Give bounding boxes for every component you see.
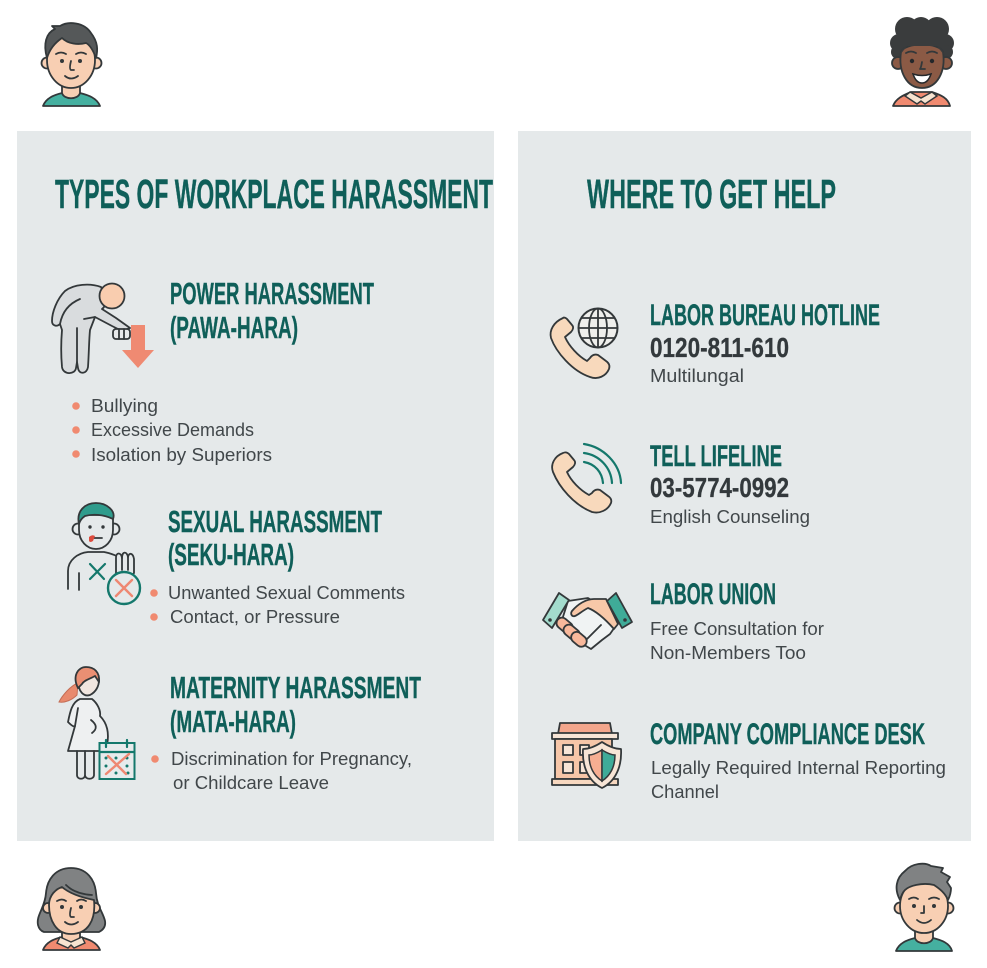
- bullet list: or Childcare Leave: [173, 773, 329, 793]
- avatar: man bottom right: [894, 864, 954, 951]
- bullet list: [150, 583, 405, 627]
- icon: telephone with signal waves: [552, 444, 621, 513]
- heading: types of workplace harassment: TYPES OF WORKPLACE HARASSMENT: [55, 171, 493, 217]
- service name: LABOR UNION: [650, 578, 776, 611]
- bullet list: Contact, or Pressure: [170, 607, 340, 627]
- avatar: man with curly hair top right: [890, 17, 954, 106]
- icon: building with shield: [552, 723, 621, 788]
- subheading: SEXUAL HARASSMENT: [168, 504, 382, 539]
- bullet list: Excessive Demands: [91, 420, 254, 440]
- help item: labor union: [543, 578, 824, 663]
- subheading romanised: (MATA-HARA): [170, 704, 296, 739]
- section: sexual harassment: [68, 503, 405, 627]
- icon: bowing person with down arrow: [52, 284, 154, 373]
- description: Channel: [651, 782, 719, 802]
- bullet list: [151, 749, 412, 793]
- icon: telephone and globe: [551, 308, 618, 378]
- bullet list: Unwanted Sexual Comments: [168, 583, 405, 603]
- description: Free Consultation for: [650, 619, 824, 639]
- bullet list: [72, 396, 272, 465]
- description: Legally Required Internal Reporting: [651, 758, 946, 778]
- section: power harassment: [52, 276, 374, 465]
- description: [650, 619, 824, 663]
- help item: company compliance desk: [552, 718, 946, 802]
- avatar: man top left: [42, 23, 102, 106]
- icon: handshake: [543, 593, 632, 649]
- subheading romanised: (SEKU-HARA): [168, 537, 294, 572]
- subheading: MATERNITY HARASSMENT: [170, 670, 421, 705]
- section: maternity harassment: [59, 667, 421, 793]
- description: Non-Members Too: [650, 643, 806, 663]
- subheading: POWER HARASSMENT: [170, 276, 374, 311]
- panel: types of workplace harassment: [17, 131, 494, 841]
- bullet list: Isolation by Superiors: [91, 445, 272, 465]
- phone number: 0120-811-610: [650, 332, 789, 363]
- help item: labor bureau hotline: [551, 299, 880, 386]
- icon: person with stop hand and cross: [68, 503, 140, 604]
- subheading romanised: (PAWA-HARA): [170, 310, 298, 345]
- bullet list: Bullying: [91, 396, 158, 416]
- avatar: woman bottom left: [38, 868, 105, 950]
- help item: tell lifeline: [552, 440, 810, 527]
- description: [651, 758, 946, 802]
- panel: where to get help: [518, 131, 971, 841]
- phone number: 03-5774-0992: [650, 472, 789, 503]
- service name: TELL LIFELINE: [650, 440, 782, 473]
- icon: pregnant woman with crossed calendar: [59, 667, 134, 779]
- description: English Counseling: [650, 507, 810, 527]
- bullet list: Discrimination for Pregnancy,: [171, 749, 412, 769]
- description: Multilungal: [650, 366, 744, 386]
